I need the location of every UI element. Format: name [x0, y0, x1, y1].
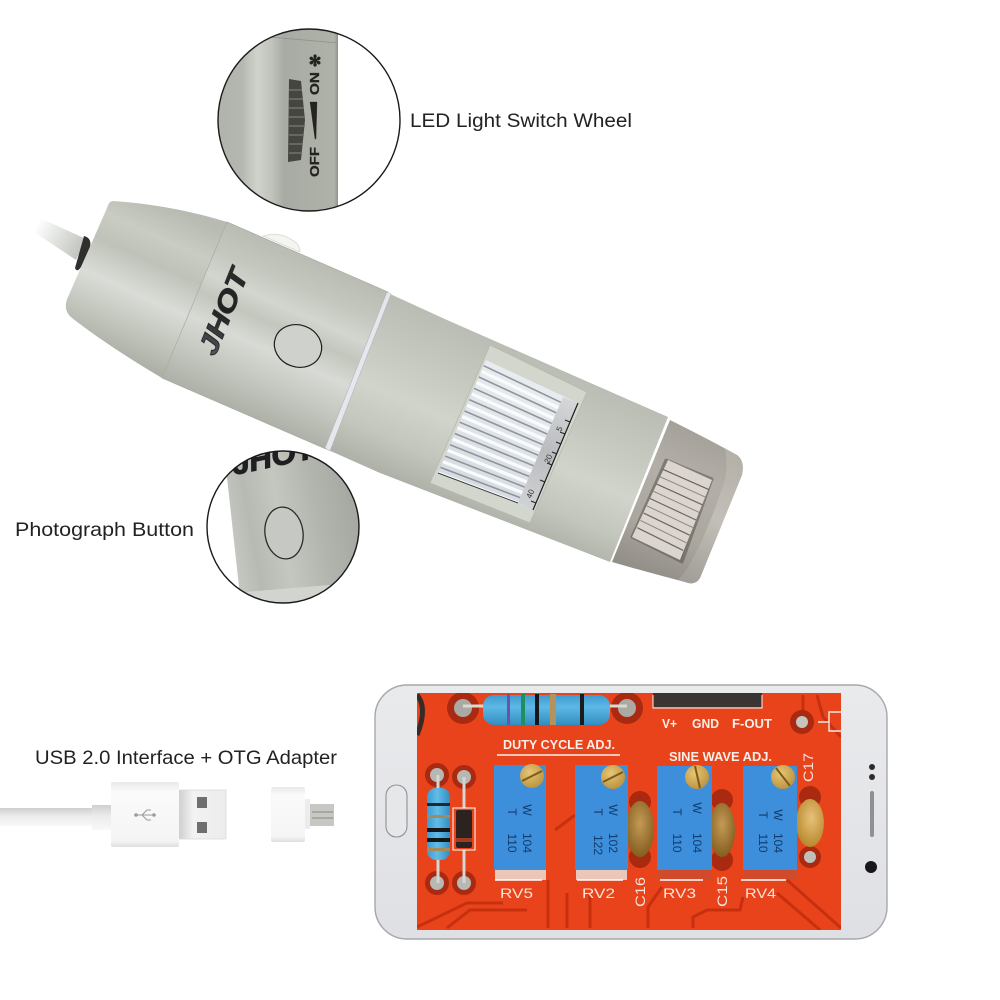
trimmer RV3: W — [690, 802, 704, 814]
board silkscreen labels — [497, 719, 772, 761]
trimmer RV2: 122 — [591, 835, 605, 855]
microscope: USB cable — [34, 218, 90, 270]
mounting pad — [790, 710, 814, 734]
button closeup — [264, 506, 304, 560]
trimmer RV4 — [741, 765, 797, 880]
magnification scale — [518, 397, 578, 510]
focus wheel peeking over the top edge — [263, 234, 300, 252]
board silkscreen labels: F-OUT — [732, 716, 772, 731]
board silkscreen labels: V+ — [662, 716, 677, 731]
tip ribbed wheel — [632, 460, 712, 562]
ON/OFF markings: ✻ — [309, 53, 321, 70]
phone screen: circuit board: RV2 — [582, 885, 615, 901]
label: LED switch: LED Light Switch Wheel — [410, 110, 632, 132]
trimmer RV5: 110 — [505, 833, 519, 853]
trimmer RV5: W — [520, 804, 534, 816]
trimmer RV5: 104 — [520, 833, 534, 853]
magnifier circle: photograph button — [206, 450, 360, 604]
phone screen: circuit board: RV3 — [663, 885, 696, 901]
ON/OFF markings: OFF — [308, 147, 322, 177]
logo closeup: JHOT — [229, 432, 320, 482]
microscope body — [66, 201, 743, 583]
smartphone — [375, 685, 887, 939]
left resistor and diode — [425, 763, 476, 895]
rear cap — [66, 201, 227, 378]
board silkscreen labels: DUTY CYCLE ADJ. — [503, 737, 615, 752]
middle section — [162, 222, 388, 449]
home button — [386, 785, 407, 837]
traces — [417, 695, 841, 930]
ON/OFF markings — [310, 54, 320, 176]
trimmer RV5: T — [505, 808, 519, 816]
label: photograph button: Photograph Button — [15, 519, 194, 541]
label: USB and OTG: USB 2.0 Interface + OTG Adapter — [35, 747, 338, 769]
trimmer RV3: 110 — [670, 833, 684, 853]
ON/OFF markings: ON — [308, 72, 322, 95]
light ring — [325, 292, 391, 451]
phone screen: circuit board: RV5 — [500, 885, 533, 901]
focus window — [430, 345, 587, 523]
pin header — [653, 693, 762, 708]
trimmer RV2 — [575, 765, 628, 880]
front section — [326, 293, 668, 562]
magnifier circle: LED switch wheel — [218, 29, 400, 211]
trimmer RV3 — [657, 765, 712, 880]
trimmer RV4: 110 — [756, 833, 770, 853]
trimmer RV3: T — [670, 808, 684, 816]
photograph button — [268, 318, 328, 374]
trimmer RV4: W — [771, 809, 785, 821]
bracket mark — [818, 712, 841, 731]
trimmer RV2: T — [591, 808, 605, 816]
logo: JHOT — [193, 262, 255, 359]
OTG adapter — [271, 787, 334, 842]
phone screen: circuit board: C17 — [800, 753, 816, 782]
board silkscreen labels: SINE WAVE ADJ. — [669, 749, 772, 764]
phone screen: circuit board: RV4 — [745, 885, 776, 901]
trimmer RV5 — [494, 764, 546, 880]
trimmer RV3: 104 — [690, 833, 704, 853]
USB plug and cable — [0, 782, 226, 847]
magnification scale: 20 — [543, 453, 555, 465]
capacitors — [626, 786, 824, 871]
phone screen: circuit board — [417, 692, 841, 930]
trimmer RV4: T — [756, 811, 770, 819]
top resistor — [447, 692, 643, 725]
usb symbol — [135, 810, 155, 820]
magnification scale: 5 — [555, 425, 565, 433]
trimmer RV4: 104 — [771, 833, 785, 853]
phone screen: circuit board: C16 — [632, 877, 648, 907]
trimmer RV2: 102 — [606, 833, 620, 853]
trimmer RV2: W — [606, 804, 620, 816]
magnification scale: 40 — [525, 488, 537, 500]
phone screen: circuit board: C15 — [714, 876, 730, 907]
switch wheel — [288, 79, 305, 162]
transparent tip — [612, 420, 743, 583]
board silkscreen labels: GND — [692, 716, 719, 731]
speaker and sensors — [865, 764, 877, 873]
